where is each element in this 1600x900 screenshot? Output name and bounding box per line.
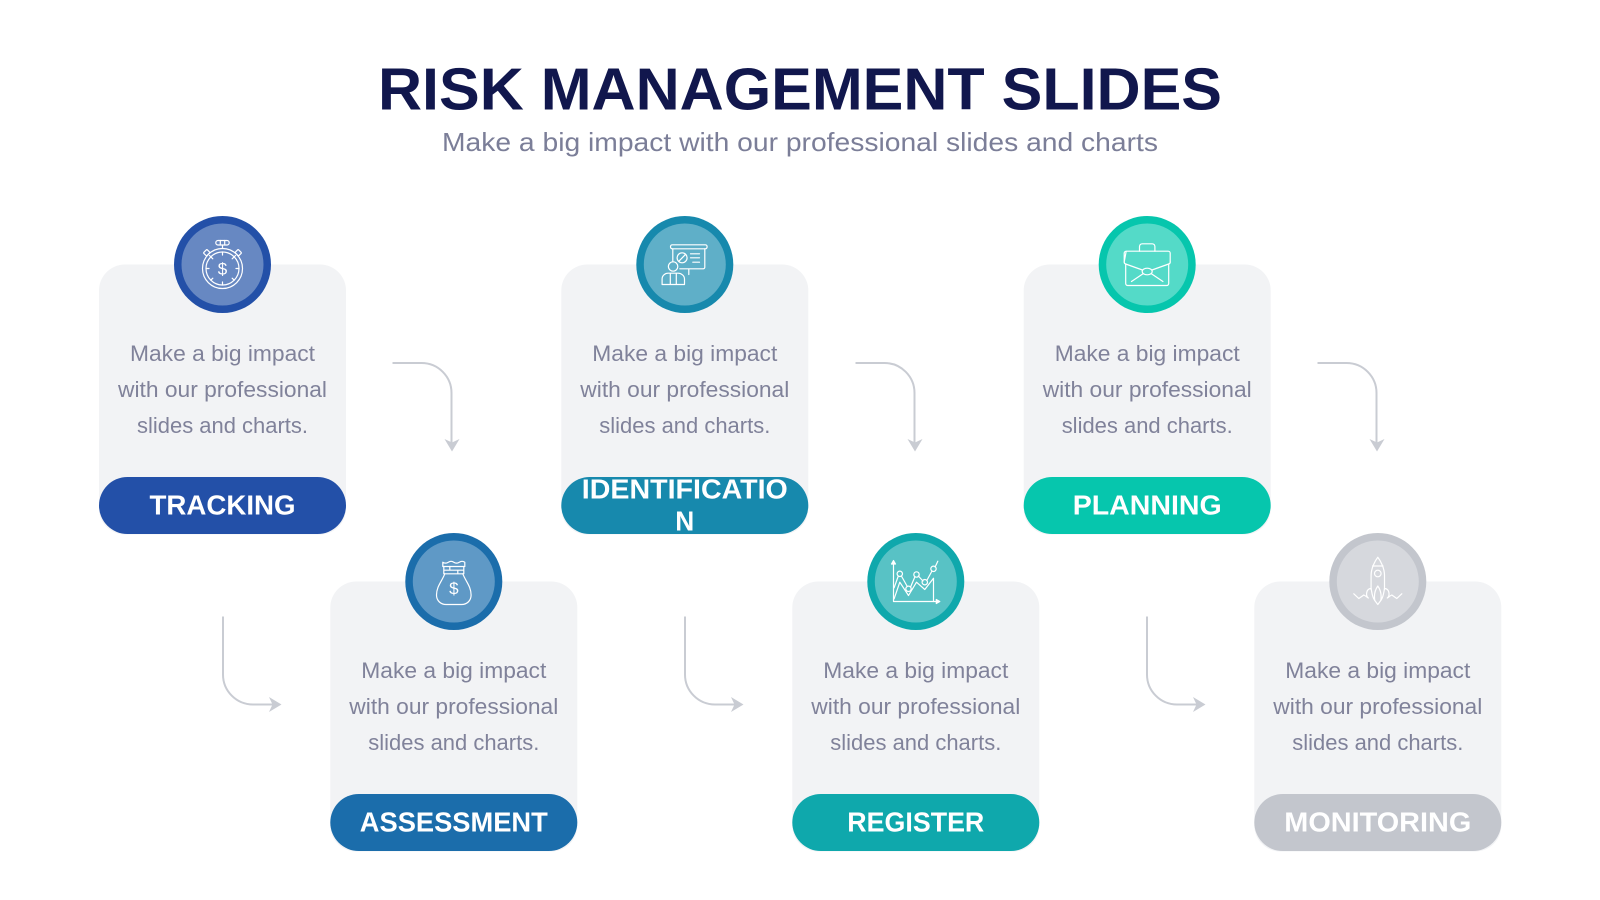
label pill	[99, 477, 346, 534]
body text: Make a big impact	[592, 341, 777, 366]
card background	[1254, 582, 1501, 852]
panel: monitoring	[1254, 533, 1501, 852]
body text: Make a big impact	[130, 341, 315, 366]
body text: with our professional	[117, 377, 327, 402]
icon: stopwatch	[174, 216, 271, 313]
card background	[330, 582, 577, 852]
arrow: planning to monitoring	[1318, 363, 1384, 452]
body text: slides and charts.	[1062, 413, 1233, 438]
body text: with our professional	[1042, 377, 1252, 402]
title: RISK MANAGEMENT SLIDES	[378, 56, 1222, 122]
icon: stopwatch: $	[218, 260, 228, 278]
panel: register	[792, 533, 1039, 852]
panel: tracking	[99, 216, 346, 534]
label pill: ASSESSMENT	[360, 806, 548, 838]
label pill	[792, 794, 1039, 851]
body text: slides and charts.	[1292, 730, 1463, 755]
panel: assessment	[330, 533, 577, 852]
body text: Make a big impact	[361, 658, 546, 683]
body text: Make a big impact	[823, 658, 1008, 683]
body text: with our professional	[1272, 694, 1482, 719]
body text: slides and charts.	[368, 730, 539, 755]
label pill: PLANNING	[1073, 490, 1222, 520]
label pill: N	[675, 506, 694, 536]
body text: Make a big impact	[1055, 341, 1240, 366]
icon: briefcase	[1099, 216, 1196, 313]
body text: with our professional	[579, 377, 789, 402]
card background	[1024, 264, 1271, 534]
body text	[117, 341, 327, 438]
card background	[99, 264, 346, 534]
label pill	[1024, 477, 1271, 534]
body text	[579, 341, 789, 438]
body text: with our professional	[810, 694, 1020, 719]
arrow: planning down to monitoring	[1147, 616, 1206, 712]
body text	[1272, 658, 1482, 755]
label pill: REGISTER	[847, 806, 984, 838]
label pill: MONITORING	[1284, 806, 1471, 838]
body text	[1042, 341, 1252, 438]
panel: planning	[1024, 216, 1271, 534]
body text	[348, 658, 558, 755]
arrow: identification to register	[856, 363, 922, 452]
icon: presentation	[636, 216, 733, 313]
icon: line chart	[867, 533, 964, 630]
label pill: TRACKING	[150, 490, 296, 520]
icon: money bag: $	[449, 579, 459, 598]
body text: slides and charts.	[137, 413, 308, 438]
label pill: IDENTIFICATIO	[582, 474, 788, 504]
body text: slides and charts.	[599, 413, 770, 438]
body text: Make a big impact	[1285, 658, 1470, 683]
icon: rocket	[1329, 533, 1426, 630]
card background	[792, 582, 1039, 852]
label pill	[330, 794, 577, 851]
arrow: identification down to register	[685, 616, 744, 712]
icon: money bag	[405, 533, 502, 630]
body text: with our professional	[348, 694, 558, 719]
subtitle: Make a big impact with our professional slides and charts	[442, 127, 1158, 157]
panel: identification	[561, 216, 808, 536]
label pill	[1254, 794, 1501, 851]
arrow: tracking to assessment	[392, 363, 460, 452]
card background	[561, 264, 808, 534]
body text	[810, 658, 1020, 755]
body text: slides and charts.	[830, 730, 1001, 755]
label pill	[561, 474, 808, 536]
arrow: tracking down to assessment	[223, 616, 282, 712]
